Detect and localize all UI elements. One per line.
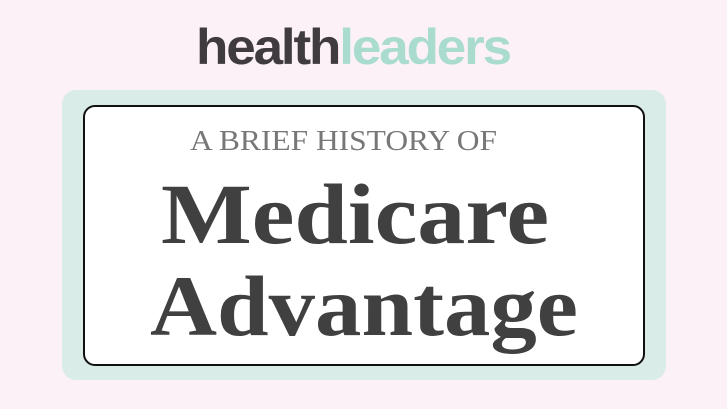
heading: Advantage: Advantage bbox=[150, 258, 578, 354]
logo: healthleaders: healthleaders bbox=[196, 19, 510, 75]
panel: white title box bbox=[83, 105, 645, 366]
subtitle: A brief history of: A BRIEF HISTORY OF bbox=[190, 126, 497, 157]
heading: Medicare: Medicare bbox=[161, 166, 549, 262]
panel: teal frame bbox=[62, 90, 666, 380]
